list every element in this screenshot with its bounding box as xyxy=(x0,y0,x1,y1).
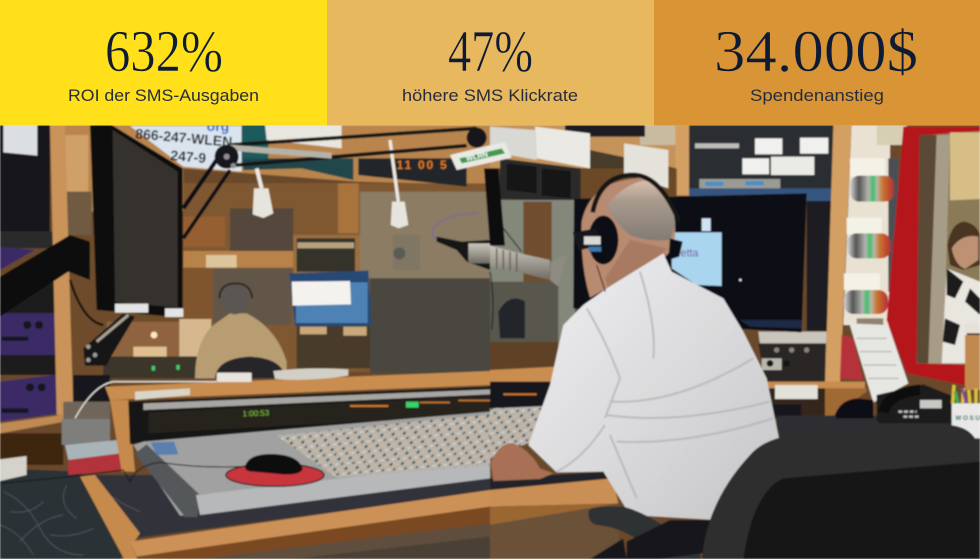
lower rack unit xyxy=(758,332,827,383)
area under window xyxy=(62,375,110,445)
wood post under shelf xyxy=(110,400,135,472)
stat number: 34.000$: 34.000$ xyxy=(714,18,918,84)
stat label: Spendenanstieg: Spendenanstieg xyxy=(750,86,884,105)
white shirt xyxy=(528,253,779,520)
equipment rack xyxy=(689,125,836,331)
studio clock xyxy=(358,158,467,187)
front desk edge xyxy=(130,490,490,559)
headphones xyxy=(573,175,683,292)
presenter's hand xyxy=(491,443,553,481)
power strip xyxy=(0,456,27,481)
wood shelf and back wall xyxy=(490,125,690,205)
left pendant lamp xyxy=(253,168,273,218)
red sign xyxy=(840,335,863,380)
stat label: höhere SMS Klickrate: höhere SMS Klickrate xyxy=(402,86,578,105)
mouse cable xyxy=(0,462,243,483)
marble desk surface xyxy=(0,468,490,559)
white pad on ledge xyxy=(273,368,348,380)
clipboard xyxy=(849,318,908,402)
stat number: 632%: 632% xyxy=(105,18,223,84)
computer mouse xyxy=(245,454,303,474)
ledge under rack xyxy=(767,382,867,418)
blue phone number sign: org xyxy=(207,118,229,134)
red door frame xyxy=(887,127,980,385)
desk wood frame xyxy=(80,475,140,559)
desk at right xyxy=(777,416,980,458)
microphone boom arm xyxy=(183,128,487,238)
mixing console: 1:00:53 xyxy=(242,408,270,418)
wood post between rack and wall xyxy=(825,125,852,385)
chrome on-air light 2 xyxy=(847,233,891,258)
right half of studio xyxy=(450,125,980,559)
microphone arm xyxy=(484,168,505,246)
left equipment racks xyxy=(0,125,60,422)
blue phone number sign xyxy=(130,126,243,173)
presenter monitor: etta xyxy=(681,247,699,259)
wall cards above lights xyxy=(844,158,885,290)
head and neck xyxy=(581,178,675,298)
monitor arm xyxy=(0,235,90,317)
woman in next room xyxy=(942,222,980,363)
mixing console xyxy=(128,387,490,517)
stat number: 47%: 47% xyxy=(448,18,533,84)
monitor mount xyxy=(70,280,135,366)
mouse pad xyxy=(226,464,324,486)
office chair arm rest xyxy=(588,506,701,559)
console faders at right xyxy=(490,406,547,459)
stat panel: 47% click rate xyxy=(327,0,654,126)
blue phone number sign: 866-247-WLEN xyxy=(135,125,233,150)
ledge under window xyxy=(490,367,557,408)
wood wall behind glass xyxy=(63,125,490,212)
stat label: ROI der SMS-Ausgaben: ROI der SMS-Ausgaben xyxy=(68,86,259,105)
arm rest pad xyxy=(490,472,609,490)
microphone holder left part xyxy=(437,237,490,270)
small preview monitors xyxy=(500,158,581,203)
window ledge xyxy=(105,371,490,400)
purple mic cable xyxy=(432,213,478,240)
window glass on right xyxy=(490,200,575,370)
foreground monitor xyxy=(90,125,183,318)
stat panel: 632% ROI xyxy=(0,0,327,126)
cream wall xyxy=(843,125,890,325)
white cable xyxy=(75,382,217,418)
presenter monitor xyxy=(573,193,807,332)
pencil cup: WOSU xyxy=(955,415,980,422)
white remote on ledge xyxy=(217,373,252,382)
photo: radio studio with presenter at mixing console xyxy=(0,118,980,559)
office chair back xyxy=(702,425,980,559)
person in back room xyxy=(195,283,287,378)
blue phone number sign: 247-9 xyxy=(170,147,207,166)
control room window background xyxy=(63,183,490,378)
small dark phone xyxy=(835,398,873,418)
black desk phone xyxy=(877,384,952,423)
papers pinned on shelf xyxy=(490,127,668,188)
stat panel: 34.000$ donations xyxy=(654,0,980,126)
presenter xyxy=(491,175,779,520)
presenter's trousers xyxy=(590,520,710,559)
microphone xyxy=(490,213,567,330)
next room through door xyxy=(917,131,980,365)
wood post right xyxy=(965,335,980,390)
back room monitor with note xyxy=(289,271,372,326)
left half of studio xyxy=(0,118,490,559)
wood desk front xyxy=(490,478,618,559)
chrome on-air light 1 xyxy=(850,176,894,202)
small red and white box xyxy=(65,440,122,475)
WLRN mic flag xyxy=(450,142,512,170)
chrome on-air light 3 xyxy=(844,290,888,314)
shirt creases xyxy=(557,272,773,498)
WLRN mic flag: WLRN xyxy=(465,150,489,163)
right pendant lamp xyxy=(390,140,408,228)
studio clock: 11 00 5 xyxy=(397,158,447,172)
pencil cup xyxy=(952,385,980,438)
wood rack post and shelf xyxy=(0,125,73,465)
paper note on wall xyxy=(265,125,342,148)
